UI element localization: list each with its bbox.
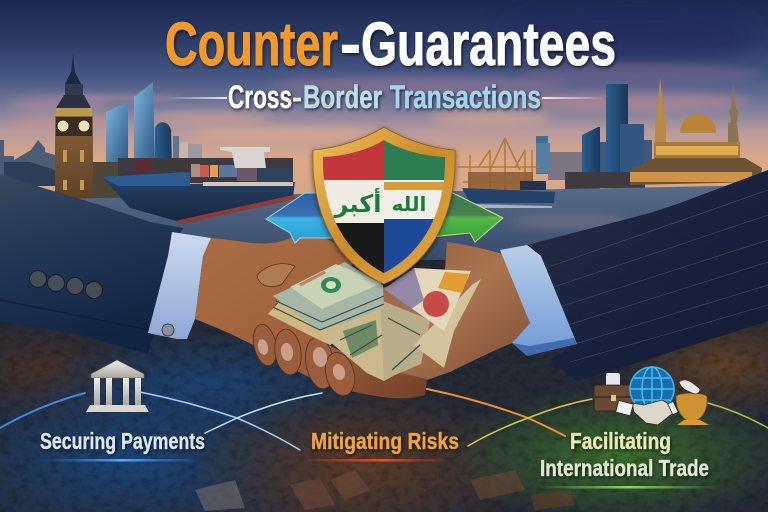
- shield with flag: [313, 127, 455, 284]
- subtitle: Cross: [228, 79, 292, 115]
- port cranes and moored ship: [458, 138, 555, 208]
- left shirt cuff: [148, 232, 211, 339]
- shield flag quarters: [322, 140, 446, 273]
- label: Mitigating Risks: Mitigating Risks: [311, 428, 459, 454]
- shield gold frame: [313, 127, 455, 284]
- left hand fingers: [250, 322, 359, 399]
- cargo ship: [102, 147, 296, 224]
- label: Facilitating International Trade: Facilitating: [570, 428, 671, 454]
- directional arrow: right green: [430, 193, 503, 242]
- subtitle: Transactions: [390, 79, 541, 115]
- right hand: [340, 242, 530, 393]
- background: sky and clouds: [0, 0, 768, 220]
- subtitle: Border: [303, 79, 382, 115]
- title: [165, 10, 616, 78]
- shield with flag: الله: [392, 192, 426, 216]
- title: -: [340, 10, 361, 78]
- label: Facilitating International Trade: International Trade: [540, 455, 709, 481]
- glowing connection arcs: [0, 389, 768, 450]
- label: Securing Payments: Securing Payments: [40, 428, 205, 454]
- right skyline: [536, 84, 652, 194]
- label: Facilitating International Trade: [538, 428, 720, 488]
- Big Ben clock tower: [55, 54, 93, 200]
- subtitle: -: [292, 79, 302, 115]
- flag script: أكبر: [334, 188, 381, 218]
- directional arrow: left blue: [266, 193, 335, 243]
- right shirt cuff: [500, 245, 577, 356]
- water: [0, 185, 768, 270]
- fingernails: [256, 338, 347, 381]
- left hand: [195, 236, 427, 399]
- title: Guarantees: [361, 10, 616, 78]
- ground: city seen from above: [0, 260, 768, 512]
- icon: bank: [86, 360, 149, 412]
- title: Counter: [165, 10, 338, 78]
- mosque: [592, 78, 762, 208]
- icon: trade cluster: [594, 367, 709, 425]
- left suit sleeve: [0, 174, 183, 354]
- sleeve buttons: [30, 270, 102, 298]
- subtitle: [165, 79, 606, 115]
- left skyline: [0, 82, 219, 200]
- banknotes: [268, 262, 481, 381]
- right suit sleeve: [527, 170, 768, 381]
